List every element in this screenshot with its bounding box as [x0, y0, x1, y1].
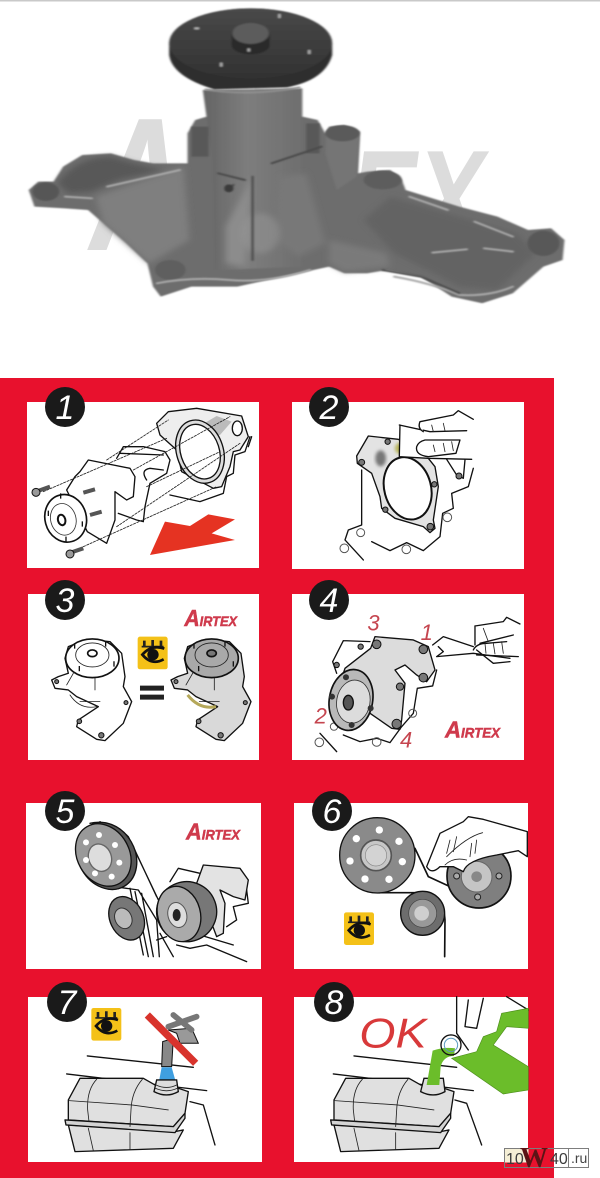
logo: AIRTEX [183, 605, 238, 631]
top pulley [65, 812, 149, 900]
red tightening sequence: 3 [367, 611, 380, 636]
expansion tank [65, 1078, 188, 1152]
water pump pulley [148, 873, 225, 950]
logo: AIRTEX [444, 716, 502, 742]
panel: step 1 remove pump [27, 402, 259, 568]
instruction board: red panel [0, 378, 554, 1178]
pump body [343, 637, 435, 729]
panel: step 6 belt tension [294, 803, 528, 969]
expansion tank [331, 1078, 454, 1152]
engine outline [345, 468, 473, 560]
icon: check eye [344, 912, 374, 945]
water pump photo [29, 8, 564, 303]
pump pulley [447, 844, 511, 908]
tensioner pulley [401, 891, 445, 935]
step number badges: 7 [58, 984, 78, 1022]
step number badges: 5 [56, 793, 75, 831]
step number badges: 6 [323, 793, 342, 831]
icon: check eye [138, 637, 168, 669]
panel: step 7 no water [28, 997, 262, 1162]
hand [427, 817, 527, 872]
water stream [158, 1067, 177, 1085]
logo: AIRTEX [185, 818, 242, 844]
engine block plate [157, 408, 248, 488]
panel: step 5 fit belt [26, 803, 261, 969]
equals sign [140, 686, 164, 700]
step number badges: 2 [319, 389, 339, 427]
pulley flange [169, 8, 332, 93]
panel: step 4 tighten bolts: 2 [314, 703, 327, 728]
hand with cloth [399, 425, 472, 459]
large pulley [340, 818, 415, 893]
engine outline [320, 641, 437, 752]
engine face with gasket seat [357, 436, 438, 533]
icon: check eye [91, 1008, 121, 1041]
prohibition bar [147, 1015, 196, 1063]
panel: step 4 tighten bolts: 4 [400, 727, 412, 752]
new pump [171, 639, 251, 741]
panel: step 8 add coolant [294, 997, 528, 1162]
site watermark: 10 [506, 1151, 524, 1168]
lower pulley [102, 891, 151, 946]
belt [90, 822, 160, 957]
site watermark: .ru [571, 1150, 587, 1166]
panel: step 4 tighten bolts [292, 594, 524, 760]
coolant bottle [457, 997, 528, 1050]
spanner and hand [433, 637, 510, 663]
pump behind [197, 865, 248, 937]
belt [380, 848, 450, 957]
step number badges [45, 387, 354, 1022]
OK text: OK [359, 1009, 429, 1056]
old pump [52, 639, 132, 741]
step number badges: 4 [320, 582, 338, 620]
step number badges: 8 [325, 984, 344, 1022]
site watermark [504, 1143, 588, 1174]
panel: step 4 tighten bolts: 1 [421, 620, 433, 645]
gasket [117, 447, 170, 522]
bolts [33, 487, 102, 554]
step number badges: 3 [56, 582, 75, 620]
tap [168, 1028, 198, 1043]
top edge line [0, 0, 600, 2]
step number badges: 1 [56, 389, 74, 427]
surrounding body lines [333, 1056, 482, 1145]
pump body [67, 460, 135, 543]
surrounding body lines [67, 1056, 215, 1145]
panel: step 2 clean surface [292, 402, 524, 569]
coolant stream [427, 1048, 455, 1085]
bolt alignment lines [43, 417, 240, 547]
panel: step 3 compare pumps [28, 594, 259, 760]
site watermark: 40 [550, 1151, 568, 1168]
pump housing [29, 88, 564, 303]
arrow: removal direction [150, 514, 235, 555]
site watermark: W [520, 1143, 548, 1174]
